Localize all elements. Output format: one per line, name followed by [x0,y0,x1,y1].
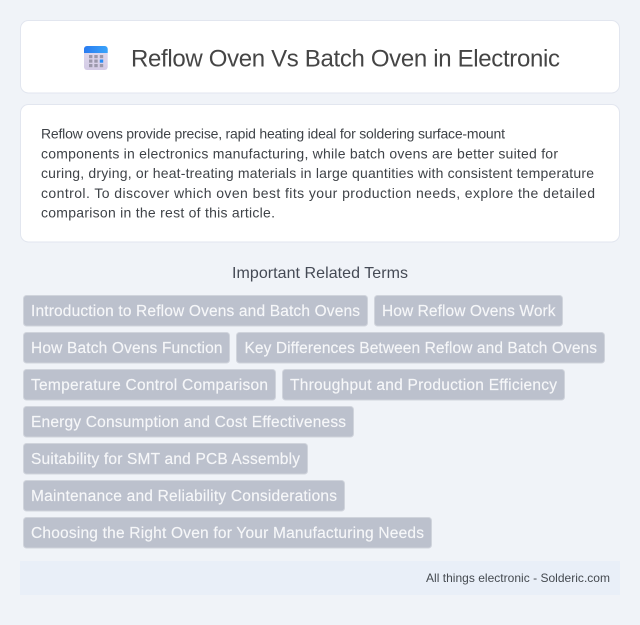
panel: introduction [20,104,620,242]
tag: choosing: Choosing the Right Oven for Your Manufacturing Needs [31,525,424,542]
tag: key differences [236,332,604,363]
footer [20,561,620,595]
heading: important related terms: Important Related Terms [232,265,408,282]
tag: how batch ovens function [24,332,230,363]
text block: introduction paragraph: control. To discover which oven best fits your production needs, explore the detailed [41,185,595,201]
panel: header [20,20,620,93]
text block: introduction paragraph: components in electronics manufacturing, while batch ovens are better suited for [41,145,558,161]
text block: introduction paragraph: comparison in the rest of this article. [41,205,275,221]
tag: temperature control: Temperature Control Comparison [31,377,268,394]
tag: introduction [24,296,368,326]
tag list [24,296,604,548]
tag: how reflow ovens work [374,296,562,326]
tag: throughput: Throughput and Production Efficiency [290,377,557,394]
text block: introduction paragraph: curing, drying, or heat-treating materials in large quantities with consistent temperature [41,165,594,181]
tag: temperature control [24,370,276,400]
text block: introduction paragraph [41,126,595,221]
tag: introduction: Introduction to Reflow Ovens and Batch Ovens [31,303,360,320]
tag: energy [24,406,354,437]
tag: key differences: Key Differences Between Reflow and Batch Ovens [244,340,597,357]
tag: maintenance: Maintenance and Reliability Considerations [31,488,337,505]
tag: how reflow ovens work: How Reflow Ovens Work [382,303,556,320]
footer: All things electronic - Solderic.com [426,571,610,585]
tag: choosing [24,518,432,548]
text block: introduction paragraph: Reflow ovens provide precise, rapid heating ideal for soldering surface-mount [41,126,505,142]
tag: energy: Energy Consumption and Cost Effectiveness [31,414,346,431]
tag: maintenance [24,480,344,511]
title: Reflow Oven Vs Batch Oven in Electronic [131,46,560,72]
tag: suitability [24,444,308,474]
tag: suitability: Suitability for SMT and PCB Assembly [31,451,300,468]
tag: how batch ovens function: How Batch Ovens Function [31,340,222,357]
tag: throughput [282,370,564,400]
icon: calendar [84,46,108,70]
